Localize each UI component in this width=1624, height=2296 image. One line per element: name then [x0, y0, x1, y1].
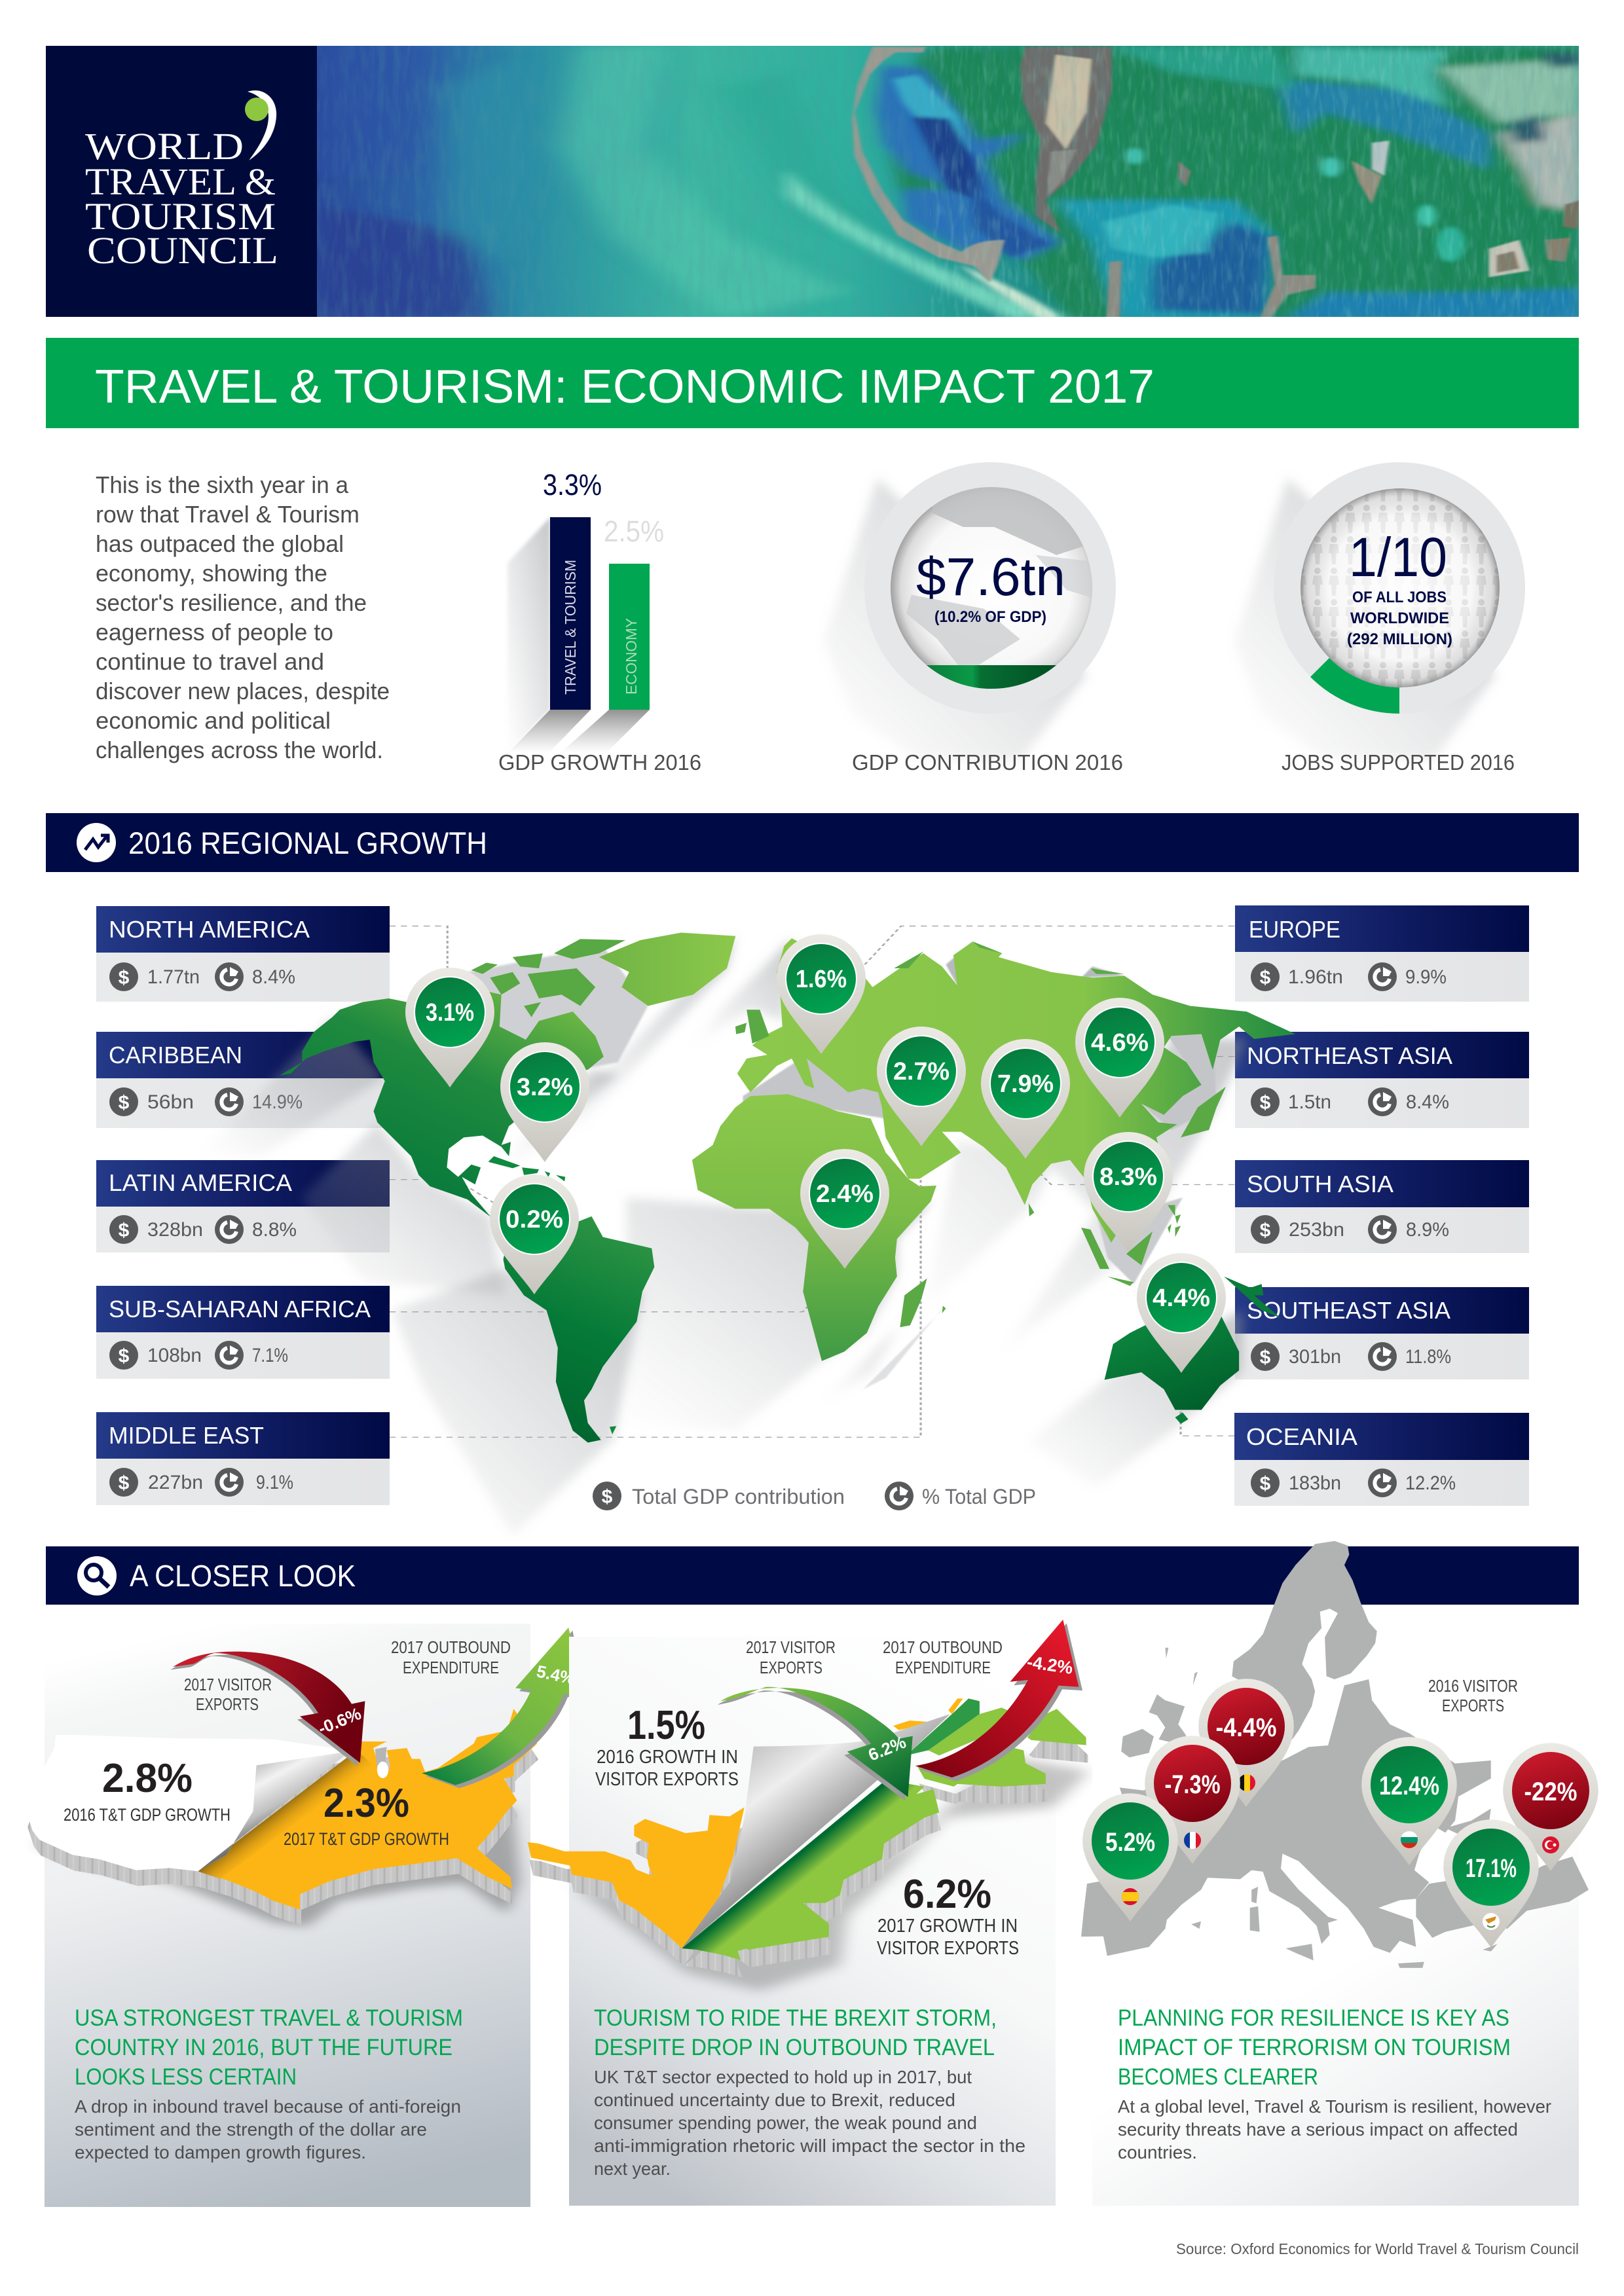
- panel: Northeast Asia: 1.5tn: [1288, 1091, 1331, 1113]
- pin: Cyprus 17.1%: [1443, 1819, 1539, 1948]
- USA labels: 2.3%: [323, 1781, 409, 1826]
- Eurasia: [737, 938, 1295, 1243]
- panel: Latin America: 328bn: [147, 1219, 203, 1241]
- Americas: [280, 933, 735, 1442]
- pin: 0.2% Latin America: 0.2%: [506, 1206, 563, 1233]
- section heading: a closer look: [46, 1546, 1579, 1605]
- panel: USA: [26, 1624, 588, 2207]
- Europe body text: security threats have a serious impact on affected: [1118, 2119, 1518, 2140]
- bar: economy: ECONOMY: [623, 618, 640, 695]
- panel: North America: [96, 906, 390, 1002]
- pin: 4.4% Oceania: [1137, 1253, 1226, 1373]
- panel: Caribbean: 56bn: [147, 1091, 194, 1113]
- panel: North America: 1.77tn: [147, 966, 200, 988]
- UK labels: 1.5%: [627, 1703, 705, 1748]
- UK labels: 2017 GROWTH IN: [877, 1916, 1018, 1937]
- UK heading: TOURISM TO RIDE THE BREXIT STORM,: [594, 2005, 997, 2031]
- USA heading: USA STRONGEST TRAVEL & TOURISM: [75, 2005, 463, 2031]
- arrow: outbound expenditure 5.4%: 5.4%: [535, 1661, 577, 1688]
- map legend: Total GDP contribution: [632, 1485, 845, 1508]
- logo swoosh icon: [245, 90, 276, 160]
- panel: Oceania: $: [1260, 1473, 1271, 1495]
- section heading: a closer look: A CLOSER LOOK: [130, 1559, 356, 1593]
- globe silhouette: [906, 487, 1098, 665]
- panel: Europe: EUROPE: [1249, 916, 1340, 943]
- panel: Middle East: 9.1%: [256, 1472, 293, 1493]
- value 2.5%: 2.5%: [604, 515, 664, 548]
- panel: terrorism in Europe: [1081, 1541, 1598, 2206]
- UK labels: VISITOR EXPORTS: [877, 1938, 1019, 1959]
- pin: 1.6% Europe: [777, 934, 866, 1054]
- panel: Caribbean: [96, 1032, 390, 1128]
- arrow: visitor exports 6.2%: [718, 1687, 913, 1800]
- logo wordmark: TRAVEL &: [85, 160, 276, 203]
- logo wordmark: [85, 125, 278, 272]
- panel: Southeast Asia: $: [1260, 1347, 1271, 1368]
- USA labels: EXPENDITURE: [403, 1658, 499, 1677]
- panel: Latin America: $: [119, 1220, 130, 1241]
- intro text block: row that Travel & Tourism: [96, 501, 360, 528]
- UK body text: next year.: [594, 2159, 671, 2179]
- bar: travel & tourism: [550, 517, 591, 710]
- Europe body text: [1118, 2096, 1551, 2162]
- pin: Cyprus 17.1%: 17.1%: [1466, 1854, 1517, 1883]
- arrow: outbound expenditure 5.4%: [422, 1628, 588, 1788]
- USA body text: [75, 2096, 461, 2162]
- icon: magnifier: [77, 1556, 117, 1595]
- panel: Oceania: OCEANIA: [1246, 1423, 1357, 1450]
- Greenland: [599, 933, 735, 1006]
- UK body text: consumer spending power, the weak pound and: [594, 2113, 977, 2133]
- source note: Source: Oxford Economics for World Travel & Tourism Council: [1176, 2240, 1579, 2257]
- Europe heading: BECOMES CLEARER: [1118, 2064, 1318, 2090]
- UK heading: DESPITE DROP IN OUTBOUND TRAVEL: [594, 2035, 995, 2060]
- panel: Sub-Saharan Africa: [96, 1286, 390, 1379]
- label 2016 visitor exports: EXPORTS: [1442, 1696, 1504, 1715]
- UK body text: UK T&T sector expected to hold up in 2017, but: [594, 2067, 972, 2087]
- Europe heading: [1118, 2005, 1511, 2090]
- panel: Europe: 9.9%: [1405, 966, 1447, 988]
- Australia: [1105, 1314, 1239, 1410]
- header banner: [46, 46, 1581, 319]
- section heading: regional growth: [46, 813, 1579, 872]
- pin: 7.9% South Asia: 7.9%: [997, 1070, 1054, 1098]
- bar chart: GDP growth 2016: [498, 468, 701, 774]
- USA labels: [64, 1637, 511, 1849]
- UK labels: EXPORTS: [760, 1658, 822, 1677]
- panel: Oceania: 12.2%: [1405, 1472, 1456, 1494]
- panel: South Asia: $: [1260, 1220, 1271, 1241]
- intro text block: discover new places, despite: [96, 678, 390, 704]
- panel: Latin America: [96, 1160, 390, 1252]
- intro text block: sector's resilience, and the: [96, 589, 367, 616]
- value 3.3%: 3.3%: [543, 468, 602, 501]
- USA labels: 2.8%: [102, 1756, 193, 1801]
- intro text block: economy, showing the: [96, 560, 327, 587]
- panel: Northeast Asia: [1235, 1032, 1529, 1128]
- panel: Middle East: [96, 1412, 390, 1505]
- Europe heading: IMPACT OF TERRORISM ON TOURISM: [1118, 2035, 1511, 2060]
- bar: economy: [609, 564, 650, 710]
- panel: Southeast Asia: 11.8%: [1405, 1346, 1451, 1368]
- Arctic islands: [471, 939, 625, 1017]
- pin: France -7.3%: -7.3%: [1164, 1770, 1221, 1799]
- pin: 3.1% North America: 3.1%: [426, 999, 474, 1027]
- panel: Sub-Saharan Africa: 7.1%: [252, 1345, 288, 1366]
- world map: [200, 933, 1295, 1536]
- Africa, Eurasia, Australia: [692, 938, 1295, 1424]
- label GDP growth: GDP GROWTH 2016: [498, 750, 701, 774]
- islands: [735, 941, 1226, 1327]
- USA body text: A drop in inbound travel because of anti-foreign: [75, 2096, 461, 2117]
- label 2016 visitor exports: [1428, 1676, 1518, 1715]
- map long shadows: [200, 936, 1247, 1536]
- logo wordmark: WORLD: [85, 125, 244, 168]
- satellite image of coastline: [317, 46, 1581, 319]
- value 1/10: 1/10: [1349, 526, 1447, 588]
- intro text block: eagerness of people to: [96, 619, 333, 646]
- pin: 4.6% Northeast Asia: [1075, 998, 1164, 1118]
- logo wordmark: COUNCIL: [87, 229, 278, 272]
- South America: [504, 1216, 654, 1442]
- panel: Caribbean: 14.9%: [252, 1091, 303, 1113]
- panel: Sub-Saharan Africa: $: [119, 1345, 130, 1367]
- USA heading: LOOKS LESS CERTAIN: [75, 2064, 297, 2090]
- panel: Europe: $: [1260, 967, 1271, 989]
- pin: Spain 5.2%: [1082, 1793, 1178, 1922]
- title bar: TRAVEL & TOURISM: ECONOMIC IMPACT 2017: [95, 361, 1154, 413]
- panel: South Asia: 8.9%: [1406, 1219, 1449, 1241]
- donut: GDP contribution: [824, 462, 1123, 774]
- intro text block: This is the sixth year in a: [96, 471, 349, 498]
- donut: jobs supported: [1234, 462, 1525, 774]
- panel: North America: 8.4%: [252, 966, 295, 988]
- map legend: [593, 1482, 1036, 1510]
- pin: Turkey -22%: -22%: [1524, 1777, 1577, 1806]
- pin: 3.2% Caribbean: 3.2%: [517, 1074, 573, 1101]
- pin: 3.1% North America: [405, 968, 494, 1087]
- panel: Southeast Asia: SOUTHEAST ASIA: [1247, 1297, 1450, 1324]
- connector lines: [390, 926, 1234, 1437]
- pin: Turkey -22%: [1503, 1743, 1598, 1871]
- pin: Belgium -4.4%: -4.4%: [1215, 1713, 1277, 1742]
- UK map: [528, 1698, 1090, 1991]
- UK body text: continued uncertainty due to Brexit, reduced: [594, 2090, 955, 2110]
- logo panel: [46, 46, 317, 317]
- UK labels: 2016 GROWTH IN: [597, 1747, 738, 1768]
- note of all jobs worldwide: [1347, 589, 1452, 648]
- UK labels: VISITOR EXPORTS: [595, 1769, 739, 1790]
- arrow: outbound expenditure -4.2%: [915, 1620, 1082, 1781]
- panel: South Asia: [1235, 1160, 1529, 1253]
- panel: Southeast Asia: 301bn: [1289, 1346, 1341, 1368]
- intro text block: [96, 471, 390, 763]
- pin: 2.7% Middle East: 2.7%: [893, 1058, 950, 1085]
- panel: Sub-Saharan Africa: 108bn: [147, 1345, 202, 1366]
- label jobs supported: JOBS SUPPORTED 2016: [1282, 750, 1515, 774]
- intro text block: continue to travel and: [96, 648, 324, 675]
- pin: France -7.3%: [1145, 1736, 1240, 1864]
- Africa: [692, 1094, 936, 1361]
- UK labels: EXPENDITURE: [895, 1658, 991, 1677]
- pin: Spain 5.2%: 5.2%: [1105, 1828, 1155, 1857]
- USA heading: COUNTRY IN 2016, BUT THE FUTURE: [75, 2035, 452, 2060]
- logo wordmark: TOURISM: [85, 195, 276, 238]
- USA labels: 2017 OUTBOUND: [391, 1637, 511, 1657]
- section heading: regional growth: 2016 REGIONAL GROWTH: [128, 826, 487, 860]
- USA labels: 2017 VISITOR: [184, 1675, 272, 1694]
- USA map: [26, 1709, 538, 1927]
- UK heading: [594, 2005, 997, 2060]
- pin: 2.7% Middle East: [877, 1027, 966, 1146]
- panel: South Asia: 253bn: [1289, 1219, 1344, 1241]
- panel: Europe: 1.96tn: [1288, 966, 1343, 988]
- pin: 2.4% Sub-Saharan Africa: 2.4%: [816, 1180, 874, 1208]
- panel: Middle East: 227bn: [148, 1472, 203, 1493]
- arrow: visitor exports -0.6%: -0.6%: [316, 1704, 364, 1738]
- USA body text: expected to dampen growth figures.: [75, 2142, 366, 2162]
- panel: Europe: [1235, 905, 1529, 1002]
- Europe heading: PLANNING FOR RESILIENCE IS KEY AS: [1118, 2005, 1509, 2031]
- icon: trend line: [77, 823, 116, 862]
- panel: Middle East: $: [119, 1472, 130, 1494]
- UK body text: anti-immigration rhetoric will impact the sector in the: [594, 2136, 1025, 2156]
- note of all jobs worldwide: WORLDWIDE: [1350, 610, 1449, 627]
- pin: 8.3% Southeast Asia: 8.3%: [1099, 1163, 1157, 1191]
- panel: Caribbean: CARIBBEAN: [109, 1042, 242, 1068]
- Europe body text: countries.: [1118, 2142, 1197, 2162]
- pin: 1.6% Europe: 1.6%: [796, 966, 847, 993]
- bar: travel & tourism: TRAVEL & TOURISM: [562, 560, 579, 695]
- pin: 8.3% Southeast Asia: [1084, 1132, 1173, 1252]
- pin: Bulgaria 12.4%: [1361, 1737, 1457, 1865]
- intro text block: has outpaced the global: [96, 530, 344, 557]
- label GDP contribution: GDP CONTRIBUTION 2016: [852, 750, 1123, 774]
- arrow: visitor exports 6.2%: 6.2%: [866, 1732, 909, 1765]
- Caribbean islands: [489, 1156, 565, 1182]
- pin: 4.6% Northeast Asia: 4.6%: [1091, 1029, 1149, 1057]
- panel: South Asia: SOUTH ASIA: [1247, 1171, 1393, 1197]
- title bar: [46, 338, 1579, 428]
- panel: Caribbean: $: [119, 1092, 130, 1114]
- pin: Belgium -4.4%: [1198, 1679, 1294, 1807]
- arrow: visitor exports -0.6%: [170, 1652, 365, 1766]
- pin: 3.2% Caribbean: [500, 1042, 589, 1162]
- UK labels: 6.2%: [903, 1872, 991, 1917]
- panel: North America: NORTH AMERICA: [109, 916, 310, 943]
- panel: UK: [528, 1620, 1090, 2206]
- UK labels: [595, 1637, 1019, 1959]
- map legend: % Total GDP: [922, 1485, 1036, 1508]
- panel: Latin America: 8.8%: [252, 1219, 297, 1241]
- panel: Northeast Asia: $: [1260, 1092, 1271, 1114]
- USA body text: sentiment and the strength of the dollar are: [75, 2119, 427, 2140]
- USA heading: [75, 2005, 463, 2090]
- UK labels: 2017 VISITOR: [746, 1637, 836, 1657]
- label 2016 visitor exports: 2016 VISITOR: [1428, 1676, 1518, 1696]
- pin: 0.2% Latin America: [490, 1175, 579, 1294]
- USA labels: EXPORTS: [196, 1694, 259, 1714]
- USA labels: 2016 T&T GDP GROWTH: [64, 1805, 231, 1825]
- panel: Latin America: LATIN AMERICA: [109, 1169, 292, 1196]
- panel: Northeast Asia: 8.4%: [1406, 1091, 1449, 1113]
- panel: Oceania: [1234, 1413, 1529, 1506]
- map legend: $: [602, 1486, 613, 1508]
- UK labels: 2017 OUTBOUND: [883, 1637, 1003, 1657]
- intro text block: challenges across the world.: [96, 737, 383, 763]
- North America: [280, 987, 604, 1217]
- value $7.6tn: $7.6tn: [916, 547, 1065, 607]
- panel: Northeast Asia: NORTHEAST ASIA: [1247, 1042, 1452, 1069]
- panel: Middle East: MIDDLE EAST: [109, 1422, 264, 1449]
- intro text block: economic and political: [96, 707, 331, 734]
- USA labels: 2017 T&T GDP GROWTH: [284, 1829, 449, 1849]
- panel: Southeast Asia: [1235, 1287, 1529, 1379]
- panel: North America: $: [119, 967, 130, 989]
- panel: Sub-Saharan Africa: SUB-SAHARAN AFRICA: [109, 1296, 371, 1322]
- panel: Oceania: 183bn: [1289, 1472, 1341, 1494]
- pin: 2.4% Sub-Saharan Africa: [800, 1149, 889, 1269]
- UK body text: [594, 2067, 1025, 2179]
- people pattern: [1301, 487, 1500, 690]
- Europe body text: At a global level, Travel & Tourism is resilient, however: [1118, 2096, 1551, 2117]
- note of all jobs worldwide: OF ALL JOBS: [1352, 589, 1447, 606]
- Europe map: [1081, 1541, 1589, 1968]
- arrow: outbound expenditure -4.2%: -4.2%: [1025, 1652, 1074, 1678]
- green fill 10.2%: [927, 665, 1056, 689]
- note of all jobs worldwide: (292 MILLION): [1347, 630, 1452, 648]
- pin: 7.9% South Asia: [981, 1039, 1070, 1159]
- pin: Bulgaria 12.4%: 12.4%: [1379, 1772, 1439, 1800]
- pin: 4.4% Oceania: 4.4%: [1153, 1285, 1210, 1312]
- note 10.2% of GDP: (10.2% OF GDP): [934, 608, 1046, 626]
